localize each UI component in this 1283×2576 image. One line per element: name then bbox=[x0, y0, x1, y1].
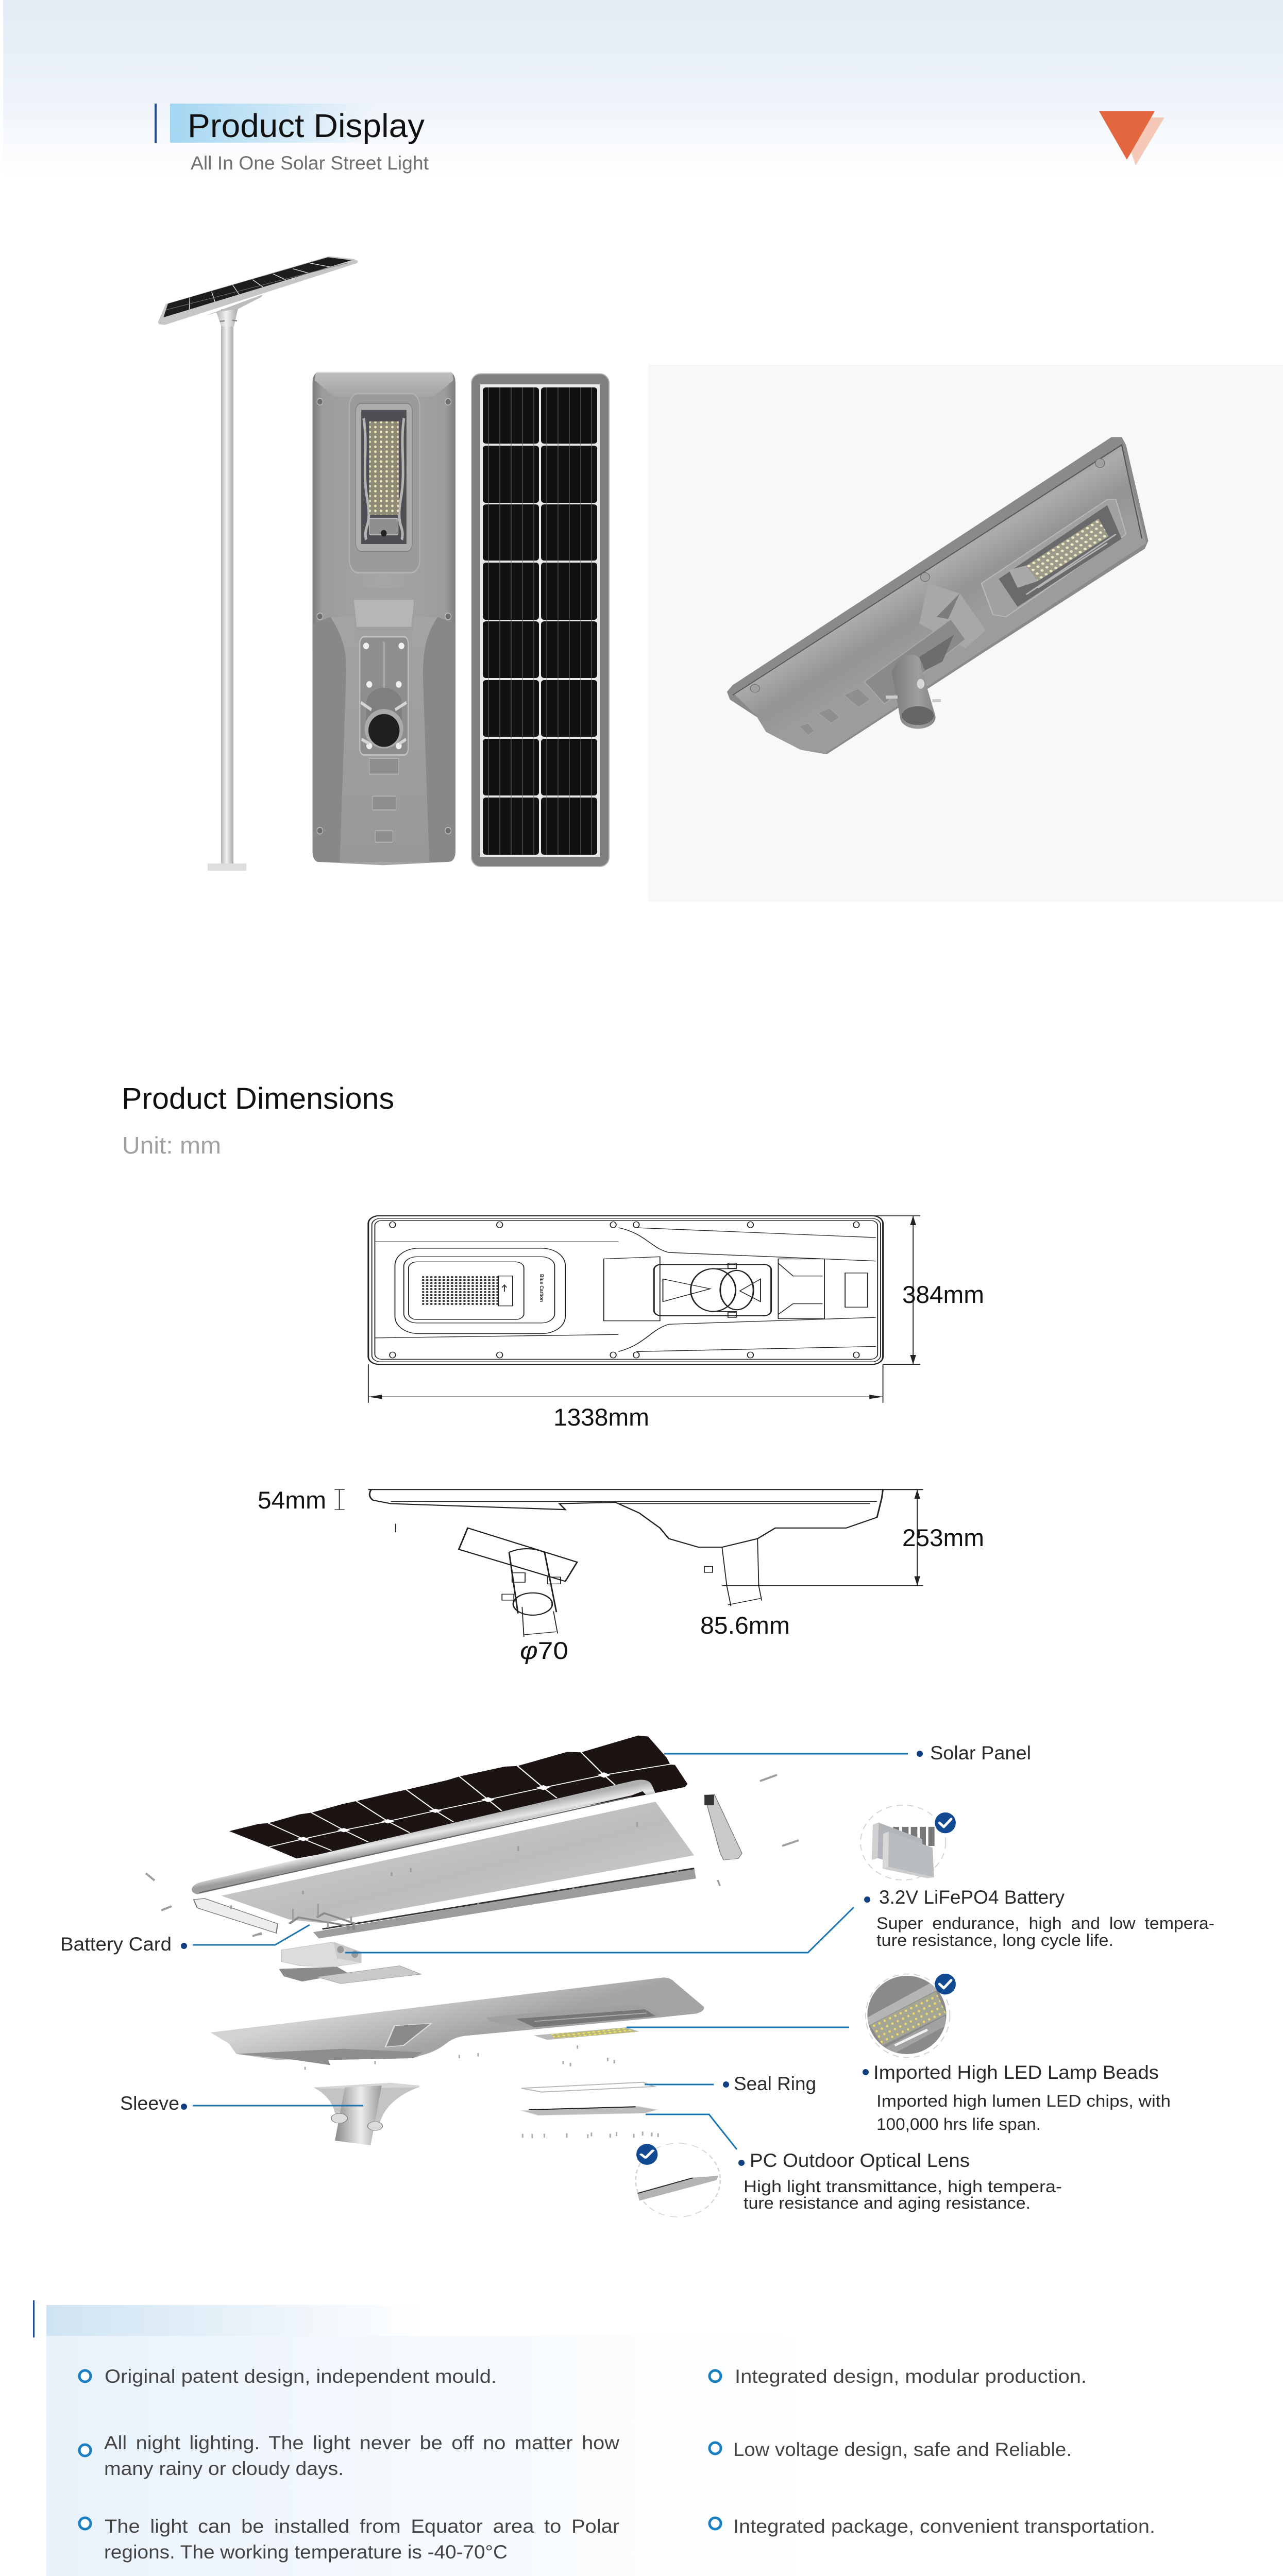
lamp head on pole bbox=[158, 256, 358, 326]
callout: Seal Ring: Seal Ring bbox=[734, 2073, 816, 2094]
seal ring bbox=[521, 2082, 654, 2092]
screws bbox=[390, 1222, 859, 1358]
lamp body bbox=[313, 372, 455, 865]
callout: LED Lamp Beads bbox=[627, 2027, 1171, 2133]
section: product dimensions bbox=[122, 1082, 394, 1159]
feature: temperature range: regions. The working temperature is -40-70°C bbox=[104, 2541, 508, 2563]
dimension lines bbox=[368, 1216, 920, 1403]
callout: Sleeve bbox=[120, 2093, 363, 2114]
callout: PC Optical Lens: High light transmittance, high tempera- bbox=[744, 2177, 1062, 2196]
callout: LiFePO4 Battery bbox=[345, 1887, 1214, 1953]
band highlight bbox=[46, 2305, 426, 2336]
feature: all night lighting bbox=[79, 2432, 619, 2479]
label: width: 384mm bbox=[902, 1281, 984, 1308]
end caps bbox=[704, 1794, 742, 1860]
exploded view: lower assembly bbox=[211, 1977, 720, 2217]
header gradient band bbox=[3, 0, 1283, 177]
mounting brackets bbox=[289, 1913, 353, 1930]
loose screws around assembly bbox=[146, 1775, 799, 1936]
illustration: solar street light on pole bbox=[158, 256, 358, 871]
pole base plate bbox=[208, 863, 246, 871]
heading: Product Dimensions: Product Dimensions bbox=[122, 1082, 394, 1115]
solar cells bbox=[229, 1736, 687, 1858]
heading highlight bbox=[170, 104, 376, 143]
feature: temperature range: The light can be installed from Equator area to Polar bbox=[105, 2516, 619, 2537]
fasteners bbox=[305, 2045, 658, 2138]
illustration: solar panel top view bbox=[471, 374, 609, 867]
feature: temperature range bbox=[79, 2516, 619, 2563]
bottom recesses bbox=[369, 758, 399, 842]
LED detail circle bbox=[866, 1974, 956, 2058]
battery box bbox=[279, 1942, 421, 1984]
feature: all night lighting: All night lighting. The light never be off no matter how bbox=[104, 2432, 619, 2453]
mount plate and pipe bbox=[360, 637, 408, 755]
battery detail circle bbox=[860, 1805, 956, 1880]
callout: Sleeve: Sleeve bbox=[120, 2093, 179, 2114]
cell busbars bbox=[488, 387, 592, 855]
fasteners bbox=[231, 1822, 720, 1936]
lower side panels bbox=[313, 617, 346, 862]
icon: check badge bbox=[935, 1974, 956, 1994]
subtitle: All In One Solar Street Light bbox=[191, 152, 429, 174]
callout: LED Lamp Beads: Imported High LED Lamp Beads bbox=[873, 2062, 1159, 2083]
exploded view: upper assembly bbox=[192, 1736, 742, 1984]
LED module housing bbox=[349, 394, 420, 573]
callout: Battery Card bbox=[60, 1925, 310, 1955]
callout: LED Lamp Beads: 100,000 hrs life span. bbox=[876, 2115, 1041, 2133]
callout: PC Optical Lens: PC Outdoor Optical Lens bbox=[750, 2150, 970, 2171]
icon: check badge bbox=[636, 2144, 657, 2165]
neck and mount bbox=[604, 1257, 868, 1321]
feature: all night lighting: many rainy or cloudy days. bbox=[104, 2458, 344, 2479]
lamp perspective view bbox=[727, 437, 1149, 754]
callout: PC Optical Lens bbox=[646, 2114, 1062, 2212]
label: length: 1338mm bbox=[553, 1403, 649, 1431]
LED module outline bbox=[395, 1248, 565, 1334]
feature: integrated package: Integrated package, convenient transportation. bbox=[733, 2516, 1155, 2537]
icon: orange triangle logo bbox=[1099, 111, 1164, 165]
callout: Battery Card: Battery Card bbox=[60, 1934, 172, 1955]
feature: low voltage: Low voltage design, safe and Reliable. bbox=[733, 2439, 1072, 2460]
callout: Solar Panel: Solar Panel bbox=[930, 1742, 1031, 1764]
dimension lines bbox=[334, 1489, 920, 1586]
LED board bbox=[534, 2027, 639, 2040]
heading: Product Display: Product Display bbox=[188, 107, 425, 144]
illustration: lamp underside front view bbox=[313, 372, 455, 865]
features background bbox=[46, 2336, 818, 2576]
lens detail circle bbox=[636, 2143, 720, 2217]
panel: perspective product photo bbox=[648, 365, 1283, 902]
optical lens bbox=[521, 2106, 657, 2115]
accent bar bbox=[155, 104, 157, 143]
detached bracket bbox=[459, 1528, 577, 1637]
neck bbox=[352, 588, 416, 640]
callout: LiFePO4 Battery: Super endurance, high and low tempera- bbox=[876, 1914, 1214, 1933]
mount plate bbox=[864, 619, 966, 704]
section: product display heading bbox=[155, 104, 429, 174]
pole socket bbox=[892, 655, 936, 729]
label: socket outer: 85.6mm bbox=[700, 1612, 790, 1639]
label: height: 253mm bbox=[902, 1524, 984, 1551]
sleeve bbox=[313, 2083, 420, 2145]
technical drawing: top view bbox=[368, 1216, 920, 1403]
feature: patent design: Original patent design, independent mould. bbox=[105, 2366, 497, 2387]
back plate bbox=[221, 1802, 694, 1923]
panel frame bbox=[471, 374, 609, 867]
callout: Seal Ring bbox=[645, 2073, 816, 2094]
screws and recesses bbox=[750, 459, 1105, 692]
solar cells bbox=[483, 387, 597, 855]
top frame bar bbox=[192, 1780, 655, 1894]
screws bbox=[317, 398, 451, 834]
label: thickness: 54mm bbox=[258, 1486, 326, 1514]
callout: LiFePO4 Battery: 3.2V LiFePO4 Battery bbox=[879, 1887, 1065, 1908]
accent bar bbox=[33, 2300, 35, 2337]
brand mark on drawing: Blue Carbon bbox=[538, 1274, 544, 1302]
callout: PC Optical Lens: ture resistance and aging resistance. bbox=[744, 2194, 1031, 2212]
LED housing bbox=[982, 500, 1126, 617]
side profile bbox=[368, 1489, 923, 1547]
callout: Solar Panel bbox=[664, 1742, 1031, 1764]
feature: integrated design: Integrated design, modular production. bbox=[735, 2366, 1087, 2387]
panel: features bbox=[33, 2300, 1155, 2576]
callout: LiFePO4 Battery: ture resistance, long cycle life. bbox=[876, 1931, 1113, 1950]
callout: LED Lamp Beads: Imported high lumen LED chips, with bbox=[876, 2092, 1171, 2110]
pole bbox=[221, 309, 233, 863]
unit note: Unit: mm bbox=[122, 1132, 221, 1159]
technical drawing: side view and bracket bbox=[334, 1489, 923, 1637]
lamp housing bbox=[211, 1977, 704, 2065]
neck bbox=[919, 583, 986, 648]
dimension labels bbox=[258, 1281, 984, 1664]
icon: check badge bbox=[935, 1812, 956, 1833]
photo background bbox=[648, 365, 1283, 902]
label: socket inner diameter: φ70 bbox=[520, 1637, 568, 1664]
lower frame bar bbox=[313, 1868, 696, 1938]
